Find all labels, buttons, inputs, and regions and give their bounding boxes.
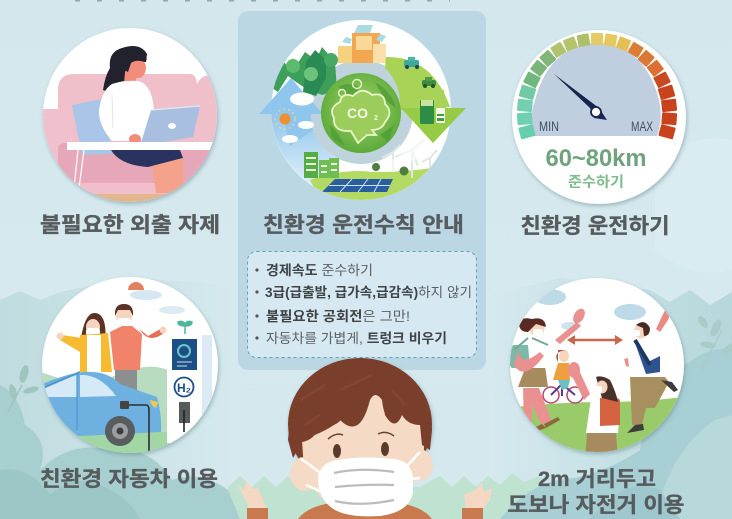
sky segment	[271, 114, 340, 186]
label: eco driving: 친환경 운전하기	[520, 215, 670, 238]
bottom landscape	[310, 168, 430, 200]
skirt	[111, 150, 183, 167]
laptop	[141, 106, 200, 142]
hair	[103, 46, 147, 92]
illustration: couple with hydrogen car: H₂	[177, 381, 191, 395]
panel: eco car	[40, 277, 218, 491]
body	[298, 502, 432, 519]
globe	[321, 73, 401, 153]
table	[67, 142, 222, 150]
arrow: green downward	[401, 108, 466, 143]
leaves left	[8, 364, 40, 412]
white wedge	[380, 138, 426, 172]
icon: CO2 cloud: 2	[374, 115, 378, 122]
icon: speed gauge: 준수하기	[568, 174, 624, 191]
batteries	[420, 100, 445, 124]
text block: rules list	[248, 252, 476, 358]
text block: rules list: 경제속도 준수하기	[266, 263, 373, 278]
right boy	[630, 377, 669, 425]
text block: rules list: 자동차를 가볍게, 트렁크 비우기	[266, 331, 447, 346]
man	[116, 310, 132, 320]
clouds	[538, 289, 566, 305]
label: walk or cycle: 2m 거리두고	[538, 468, 656, 491]
clouds and sun	[128, 282, 144, 290]
panel: walk or cycle: 도보나 자전거 이용	[508, 494, 684, 517]
mask	[300, 452, 420, 516]
sweater	[99, 81, 155, 141]
cushion	[72, 99, 112, 155]
hair back and head	[288, 358, 432, 490]
hands	[237, 481, 266, 510]
grass	[520, 398, 678, 452]
woman	[82, 313, 106, 335]
car	[40, 372, 161, 438]
cars	[404, 57, 436, 88]
heading: eco driving rules: 친환경 운전수칙 안내	[263, 214, 464, 237]
illustration: boy with mask	[237, 358, 492, 519]
icon: CO2 cycle circle	[259, 20, 466, 205]
charging station	[167, 333, 217, 443]
left girl	[523, 388, 552, 427]
face	[124, 60, 146, 82]
gauge labels: MIN	[539, 118, 559, 134]
legs	[152, 158, 184, 193]
label: eco car: 친환경 자동차 이용	[40, 468, 218, 491]
label: stay home: 불필요한 외출 자제	[40, 214, 220, 237]
icon: speed gauge	[512, 30, 686, 204]
needle	[554, 74, 607, 120]
panel: eco driving rules	[238, 11, 486, 370]
buildings	[338, 46, 352, 63]
panel: stay home	[40, 28, 223, 237]
raised arm	[555, 322, 581, 344]
leaves right	[696, 314, 732, 372]
icon: speed gauge: MAX	[631, 118, 653, 134]
illustration: people keeping distance	[505, 278, 690, 460]
hand	[129, 134, 141, 142]
cyclist child	[543, 387, 559, 403]
inner ring	[309, 60, 413, 164]
speed value: 60~80km	[546, 145, 646, 172]
arrow: blue upward	[259, 78, 323, 146]
solar panels	[322, 179, 393, 192]
green office	[304, 152, 318, 178]
text block: rules list: 3급(급출발, 급가속,급감속)하지 않기	[265, 285, 472, 300]
ears	[290, 457, 320, 491]
icon: CO2 cloud	[332, 80, 390, 143]
hill right	[385, 57, 450, 110]
illustration: couple with hydrogen car	[40, 277, 218, 460]
text block: rules list: 불필요한 공회전 은 그만!	[266, 309, 410, 324]
panel: walk or cycle	[505, 278, 690, 517]
wind turbines	[382, 139, 437, 178]
eyebrows and eyes	[328, 432, 394, 439]
arrow: distance	[567, 335, 623, 345]
gauge segments	[517, 33, 677, 140]
middle girl	[586, 433, 618, 452]
forest	[272, 47, 337, 95]
panel: eco driving speed	[512, 30, 686, 238]
icon: CO2 cloud: CO	[347, 105, 368, 121]
illustration: woman with laptop on sofa	[40, 28, 223, 204]
